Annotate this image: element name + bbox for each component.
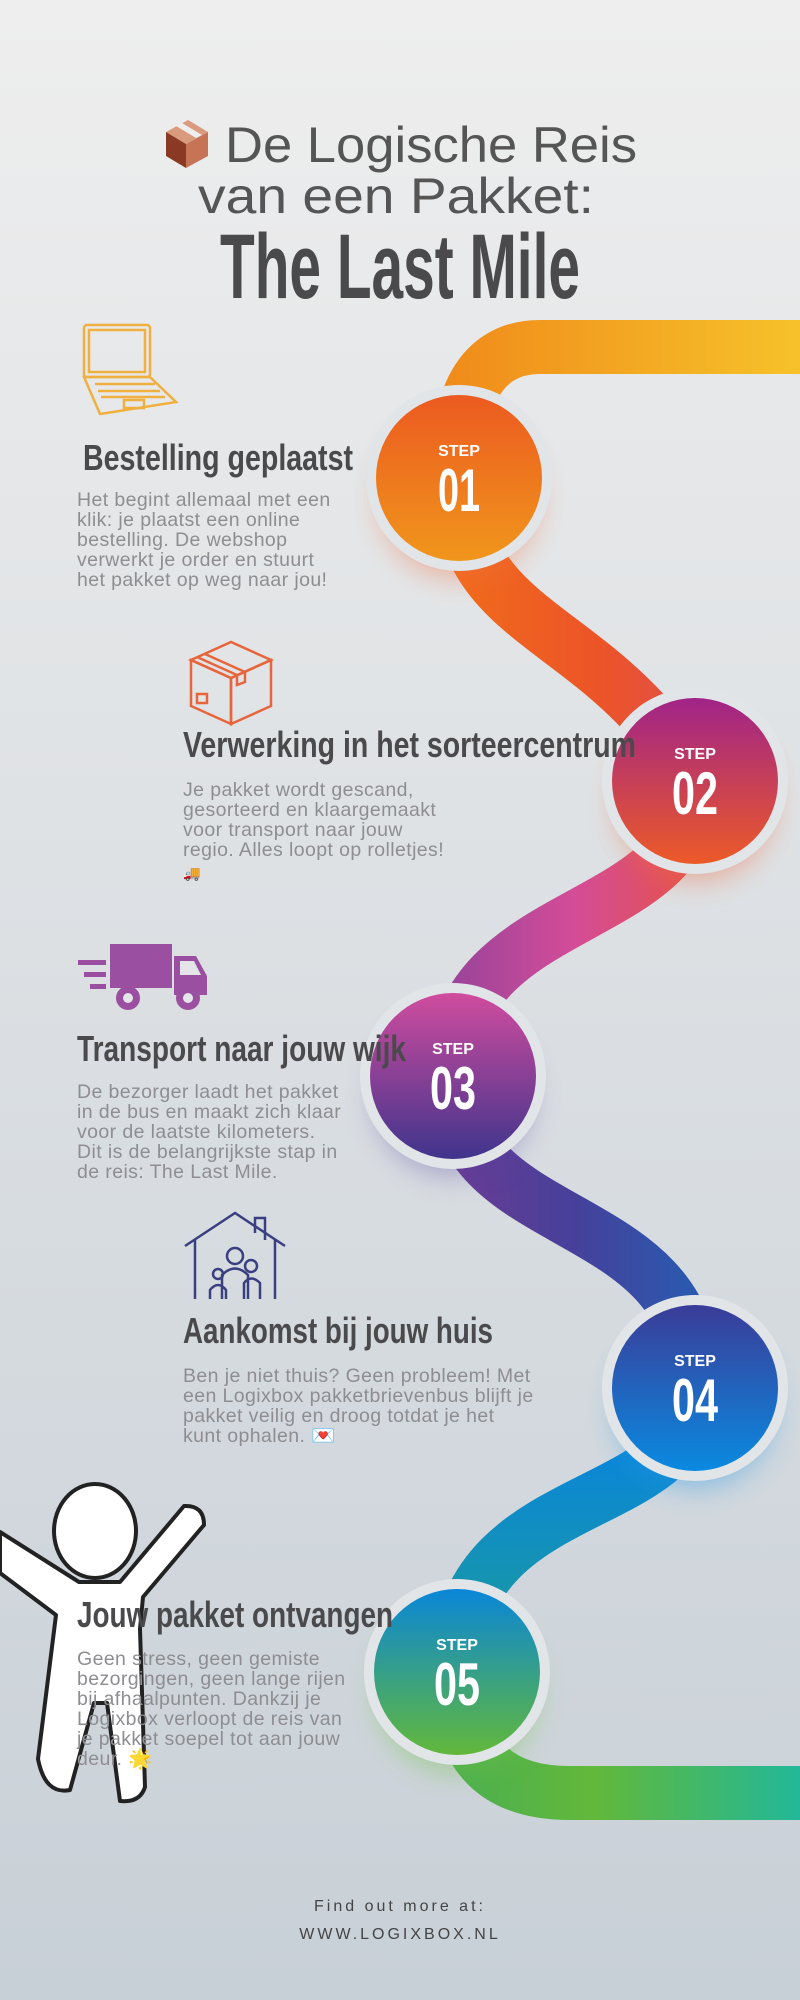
circle: step 03: STEP [432, 1041, 474, 1058]
circle: step 02 [602, 688, 788, 881]
step circles [360, 385, 788, 1772]
panel: step 2: 🚚 [183, 865, 201, 882]
panel: step 2: voor transport naar jouw [183, 819, 403, 841]
icon: delivery truck [78, 944, 207, 1010]
circle: step 05 [364, 1579, 550, 1772]
panel: step 1: klik: je plaatst een online [77, 509, 300, 531]
panel: step 5: deur. 🌟 [77, 1747, 153, 1770]
panel: step 5: je pakket soepel tot aan jouw [76, 1728, 341, 1750]
panel: step 2 [183, 642, 636, 882]
panel: step 1 [77, 325, 353, 591]
panel: step 3: de reis: The Last Mile. [77, 1161, 278, 1183]
icon: laptop [84, 325, 176, 414]
panel: step 5: bij afhaalpunten. Dankzij je [77, 1688, 321, 1710]
panel: step 2: regio. Alles loopt op rolletjes! [183, 839, 444, 861]
circle: step 05: STEP [436, 1637, 478, 1654]
panel: step 4: een Logixbox pakketbrievenbus blijft je [183, 1385, 534, 1407]
circle: step 03: 03 [430, 1055, 476, 1122]
panel: step 5: Geen stress, geen gemiste [77, 1648, 320, 1670]
panel: step 1: verwerkt je order en stuurt [77, 549, 314, 571]
circle: step 01: 01 [438, 457, 480, 524]
panel: step 5: Jouw pakket ontvangen [77, 1594, 393, 1635]
panel: step 3: Dit is de belangrijkste stap in [77, 1141, 338, 1163]
panel: step 3: Transport naar jouw wijk [77, 1028, 407, 1069]
icon: package box [166, 120, 208, 168]
panel: step 3 [77, 944, 407, 1183]
panel: step 3: voor de laatste kilometers. [77, 1121, 315, 1143]
circle: step 02: 02 [672, 760, 718, 827]
title: De Logische Reis [225, 117, 637, 173]
circle: step 02: STEP [674, 746, 716, 763]
title: van een Pakket: [198, 168, 594, 224]
circle: step 01 [366, 385, 552, 578]
icon: cheering stick figure [0, 1484, 204, 1801]
circle: step 05: 05 [434, 1651, 480, 1718]
panel: step 4: kunt ophalen. 💌 [183, 1425, 336, 1447]
panel: step 3: in de bus en maakt zich klaar [77, 1101, 341, 1123]
panel: step 2: gesorteerd en klaargemaakt [183, 799, 436, 821]
panel: step 4: pakket veilig en droog totdat je het [183, 1405, 495, 1427]
panel: step 5: Logixbox verloopt de reis van [77, 1708, 342, 1730]
panel: step 2: Verwerking in het sorteercentrum [183, 724, 636, 765]
circle: step 01: STEP [438, 443, 480, 460]
circle: step 04: 04 [672, 1367, 718, 1434]
circle: step 03 [360, 983, 546, 1176]
icon: cardboard box [191, 642, 271, 724]
icon: house with family [185, 1213, 285, 1299]
panel: step 1: Bestelling geplaatst [83, 437, 353, 478]
panel: step 3: De bezorger laadt het pakket [77, 1081, 339, 1103]
circle: step 04: STEP [674, 1353, 716, 1370]
title: The Last Mile [220, 216, 580, 318]
panel: step 1: het pakket op weg naar jou! [77, 569, 327, 591]
panel: step 2: Je pakket wordt gescand, [183, 779, 414, 801]
circle: step 04 [602, 1295, 788, 1488]
footer: WWW.LOGIXBOX.NL [299, 1926, 501, 1943]
panel: step 5 [76, 1594, 393, 1770]
panel: step 1: bestelling. De webshop [77, 529, 287, 551]
panel: step 4 [183, 1213, 534, 1447]
title [166, 117, 637, 318]
panel: step 4: Aankomst bij jouw huis [183, 1310, 493, 1351]
winding road path [453, 347, 800, 1793]
panel: step 1: Het begint allemaal met een [77, 489, 331, 511]
panel: step 4: Ben je niet thuis? Geen probleem! Met [183, 1365, 531, 1387]
footer [299, 1898, 501, 1943]
footer: Find out more at: [314, 1898, 486, 1915]
panel: step 5: bezorgingen, geen lange rijen [77, 1668, 346, 1690]
